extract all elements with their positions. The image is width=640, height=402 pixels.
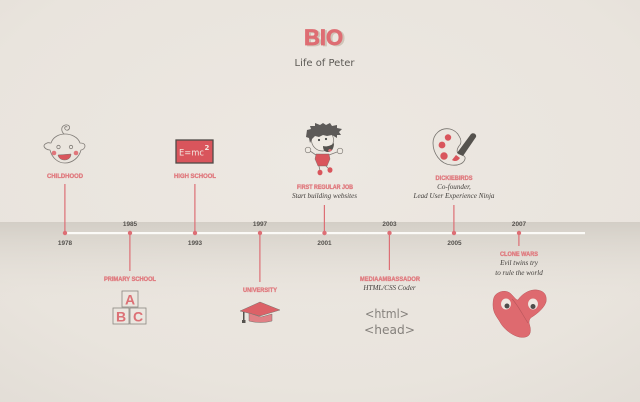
year: 2003	[382, 221, 397, 228]
description	[413, 183, 495, 200]
connector and marker	[63, 184, 67, 235]
connector and marker	[387, 231, 392, 270]
connector and marker	[452, 205, 456, 235]
year: 2007	[512, 221, 527, 228]
icon: abc blocks: A	[125, 292, 135, 308]
connector and marker	[128, 231, 132, 271]
year: 2001	[317, 240, 332, 247]
icon: blackboard: 2	[204, 144, 210, 152]
year: 1985	[123, 221, 138, 228]
icon: abc blocks: C	[133, 308, 143, 324]
title: BIO	[304, 25, 343, 50]
subtitle: Life of Peter	[294, 58, 355, 69]
heading: mediaambassador: MEDIAAMBASSADOR	[360, 276, 420, 283]
heading: childhood: CHILDHOOD	[47, 173, 84, 180]
icon: abc blocks: B	[116, 308, 126, 324]
icon: palette	[433, 129, 476, 165]
icon: html code: <html>	[365, 306, 409, 321]
event: university	[240, 221, 280, 323]
icon: graduation cap	[240, 302, 280, 323]
event: childhood	[44, 125, 85, 247]
heading: university: UNIVERSITY	[243, 287, 278, 294]
description: HTML/CSS Coder	[362, 284, 416, 292]
event: first regular job	[292, 123, 357, 247]
connector and marker	[193, 184, 197, 235]
event: clone wars	[493, 221, 546, 337]
connector and marker	[258, 231, 262, 282]
description	[495, 259, 543, 277]
description: Evil twins try	[499, 259, 539, 267]
description: Lead User Experience Ninja	[413, 192, 495, 200]
connector and marker	[322, 205, 327, 235]
icon: html code: <head>	[364, 322, 415, 337]
year: 1997	[253, 221, 268, 228]
icon: baby face	[44, 125, 85, 163]
icon: jumping boy	[305, 123, 343, 175]
timeline axis	[65, 232, 585, 234]
heading: primary school: PRIMARY SCHOOL	[104, 276, 156, 283]
icon: abc blocks	[113, 291, 146, 324]
event: high school	[174, 140, 216, 247]
title: BIO	[306, 26, 345, 51]
year: 1978	[58, 240, 73, 247]
connector and marker	[517, 231, 521, 246]
event: primary school	[104, 221, 156, 324]
description: Co-founder,	[437, 183, 471, 191]
heading: dickiebirds: DICKIEBIRDS	[436, 175, 472, 182]
year: 1993	[188, 240, 203, 247]
description: to rule the world	[495, 269, 543, 277]
event: dickiebirds	[413, 129, 495, 247]
event: mediaambassador	[360, 221, 420, 337]
heading: clone wars: CLONE WARS	[500, 251, 538, 258]
heading: high school: HIGH SCHOOL	[174, 173, 216, 180]
description: Start building websites	[292, 192, 357, 200]
icon: blackboard: E=mc	[179, 148, 204, 158]
year: 2005	[447, 240, 462, 247]
heading: first regular job: FIRST REGULAR JOB	[297, 184, 353, 191]
icon: blackboard	[176, 140, 213, 163]
icon: red twin monster	[493, 290, 546, 337]
icon: html code	[364, 306, 415, 337]
